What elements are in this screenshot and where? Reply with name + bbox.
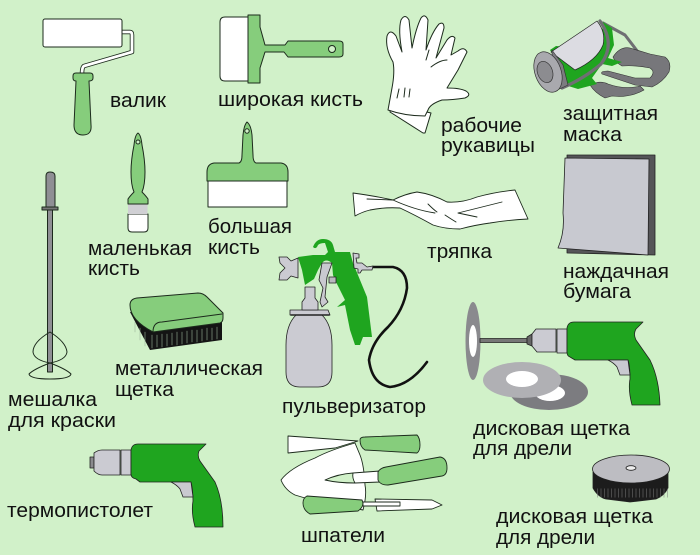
label: большая кисть (208, 215, 292, 259)
tool: work gloves (387, 16, 469, 133)
label: наждачная бумага: бумага (563, 280, 632, 303)
tool: wide brush (220, 15, 343, 83)
label: маленькая кисть (88, 237, 192, 280)
label: наждачная бумага (563, 260, 669, 303)
label: маленькая кисть: маленькая (88, 237, 192, 260)
label: рабочие рукавицы: рабочие (441, 114, 522, 137)
label: мешалка для краски: для краски (8, 409, 116, 432)
tool: paint sprayer (279, 239, 427, 387)
tool: heat gun (90, 444, 223, 527)
label: дисковая щетка для дрели (upper): дисковая щетка (473, 417, 631, 440)
label: защитная маска: защитная (563, 102, 658, 125)
label: защитная маска (563, 102, 658, 146)
label: металлическая щетка (115, 357, 263, 401)
label: мешалка для краски (8, 388, 116, 432)
label: большая кисть: кисть (208, 236, 260, 259)
label: маленькая кисть: кисть (88, 257, 140, 280)
tool: spatulas (281, 435, 447, 514)
label: большая кисть: большая (208, 215, 292, 238)
tool: metal brush (130, 293, 223, 350)
label: защитная маска: маска (563, 123, 623, 146)
tool: small brush (128, 133, 148, 232)
label: наждачная бумага: наждачная (563, 260, 669, 283)
label: шпатели: шпатели (301, 524, 385, 547)
tool: rag (353, 190, 528, 229)
label: дисковая щетка для дрели (lower): для дрели (496, 526, 595, 549)
label: дисковая щетка для дрели (lower) (496, 505, 654, 549)
tool: sandpaper (558, 155, 655, 255)
label: пульверизатор: пульверизатор (282, 395, 426, 418)
label: металлическая щетка: металлическая (115, 357, 263, 380)
tool: paint roller (43, 19, 132, 135)
label: валик: валик (110, 89, 167, 112)
label: дисковая щетка для дрели (upper): для дрели (473, 437, 572, 460)
label: тряпка: тряпка (427, 240, 493, 263)
tool: paint mixer (29, 172, 71, 379)
tool: round disc brush (592, 455, 670, 502)
label: дисковая щетка для дрели (lower): дисковая щетка (496, 505, 654, 528)
label: широкая кисть: широкая кисть (218, 88, 363, 111)
label: термопистолет: термопистолет (7, 499, 154, 522)
tool: protective mask (529, 21, 670, 98)
label: рабочие рукавицы (441, 114, 535, 157)
label: рабочие рукавицы: рукавицы (441, 134, 535, 157)
tool: large brush (207, 122, 288, 207)
label: дисковая щетка для дрели (upper) (473, 417, 631, 460)
label: металлическая щетка: щетка (115, 378, 175, 401)
label: мешалка для краски: мешалка (8, 388, 98, 411)
tool: disc brush on drill (466, 302, 660, 410)
